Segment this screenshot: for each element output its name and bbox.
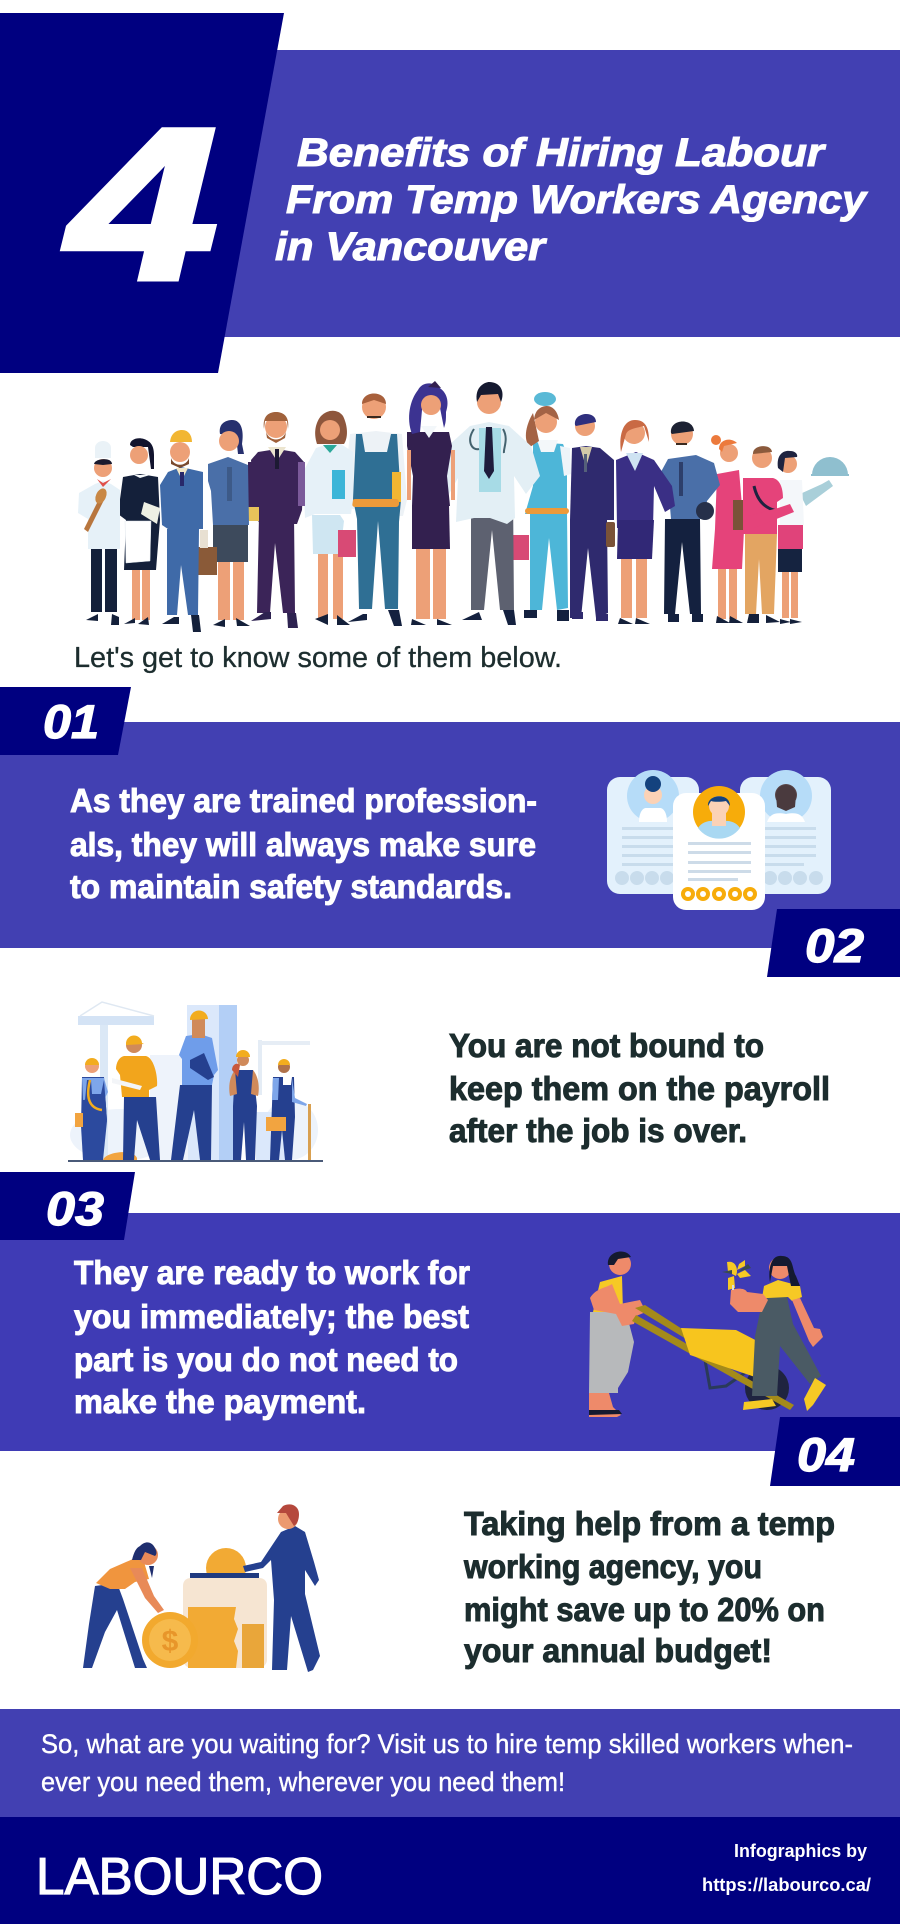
illustration: construction crew: [68, 1002, 323, 1162]
benefit 01 text: to maintain safety standards.: [70, 868, 512, 905]
panel: call to action: So, what are you waiting for? Visit us to hire temp skilled workers when-: [41, 1729, 853, 1759]
jar with coins: [142, 1548, 267, 1668]
figure: mechanic in overalls: [344, 394, 407, 626]
benefit 01 text: As they are trained profession-: [70, 782, 537, 819]
benefit 03 text: you immediately; the best: [74, 1298, 469, 1335]
woman with pinwheel: [722, 1256, 826, 1411]
title: Benefits of Hiring Labour: [297, 131, 827, 175]
benefit 04 text: might save up to 20% on: [464, 1591, 825, 1628]
benefit 02 text: You are not bound to: [449, 1027, 764, 1064]
figure: nurse in blue overalls: [512, 392, 571, 621]
credit: Infographics by: [734, 1841, 867, 1861]
benefit 03 text: make the payment.: [74, 1383, 366, 1420]
figure: man in blue suit with hard hat: [160, 430, 203, 632]
man: [243, 1504, 320, 1672]
centre card: [673, 786, 765, 910]
benefit 03 text: [74, 1254, 470, 1420]
worker in overalls, hands on hips: [229, 1050, 259, 1160]
benefit 04 text: your annual budget!: [464, 1632, 772, 1669]
figure: maid: [118, 438, 160, 625]
logo wordmark: LABOURCO: [36, 1848, 323, 1906]
panel: call to action: [0, 1709, 900, 1817]
figure: nurse in white: [303, 411, 356, 625]
figure: man in pink shirt: [743, 446, 794, 623]
header banner: [0, 13, 900, 373]
big number 4: 4: [63, 83, 218, 325]
panel: footer: [0, 1817, 900, 1924]
panel: benefit 01: [0, 687, 900, 948]
right card: [740, 770, 831, 894]
credit: [702, 1841, 871, 1895]
figure: waitress with cloche: [778, 451, 849, 624]
benefit 01 text: als, they will always make sure: [70, 826, 536, 863]
figure: police officer: [656, 421, 720, 622]
benefit 02 text: after the job is over.: [449, 1112, 747, 1149]
benefit 04 text: Taking help from a temp: [464, 1505, 835, 1542]
illustration: row of workers: [78, 381, 849, 632]
figure: flight attendant: [407, 381, 455, 625]
benefit 03 text: They are ready to work for: [74, 1254, 470, 1291]
worker with toolbox and cane: [266, 1059, 311, 1160]
credit: https://labourco.ca/: [702, 1875, 871, 1895]
benefit 02 text: keep them on the payroll: [449, 1070, 830, 1107]
benefit 01 text: [70, 782, 537, 905]
number tab 03: 03: [46, 1182, 104, 1235]
number tab 02: 02: [805, 919, 864, 972]
number tab 04: 04: [797, 1428, 855, 1481]
figure: chef: [78, 441, 120, 625]
benefit 04 text: [463, 1505, 835, 1669]
illustration: saving coins in a jar: [83, 1504, 320, 1672]
benefit 02 text: [449, 1027, 830, 1149]
number tab 04: [770, 1417, 900, 1486]
man: [589, 1251, 646, 1417]
foreman with clipboard: [171, 1010, 218, 1160]
number tab 01: [0, 687, 131, 755]
jar with coins: $: [162, 1625, 179, 1658]
panel: benefit 03: [0, 1172, 900, 1451]
figure: woman in pink suit: [711, 435, 744, 623]
intro text: Let's get to know some of them below.: [74, 642, 562, 674]
benefit 04 text: working agency, you: [463, 1548, 762, 1585]
figure: man in dark suit: [570, 414, 615, 621]
number tab 03: [0, 1172, 135, 1240]
figure: woman in purple suit: [616, 420, 675, 624]
icon: candidate profile cards: [607, 770, 831, 910]
figure: pilot: [248, 412, 305, 628]
wheelbarrow: [632, 1305, 794, 1410]
panel: call to action: ever you need them, wherever you need them!: [41, 1767, 565, 1797]
number tab 02: [767, 909, 900, 977]
figure: policewoman with briefcase: [188, 420, 250, 627]
woman: [83, 1542, 164, 1668]
left card: [607, 770, 699, 894]
wheel and frame: [705, 1360, 789, 1410]
figure: doctor: [438, 382, 540, 625]
title: From Temp Workers Agency: [286, 178, 868, 222]
title: [275, 131, 868, 269]
title: in Vancouver: [275, 225, 548, 269]
number tab 01: 01: [43, 695, 99, 748]
construction background: [68, 1002, 323, 1162]
worker with rope: [75, 1058, 108, 1160]
illustration: wheelbarrow pair: [589, 1251, 826, 1417]
worker with orange shirt: [112, 1035, 160, 1160]
benefit 03 text: part is you do not need to: [74, 1341, 458, 1378]
